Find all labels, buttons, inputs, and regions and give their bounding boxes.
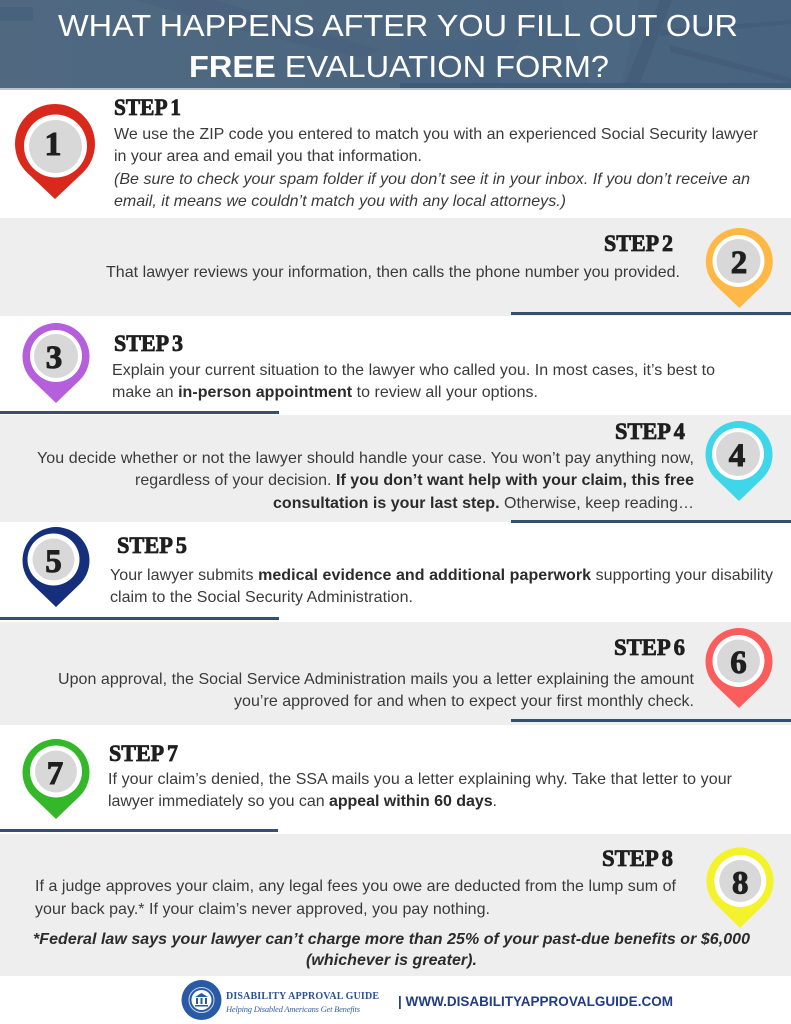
step 4 text: regardless of your decision. If you don’t want help with your claim, this free: [135, 472, 694, 489]
panel: step 4: [0, 415, 791, 523]
icon: pin 6: 6: [730, 645, 747, 681]
panel: step 2: [0, 218, 791, 316]
step 8 text: your back pay.* If your claim’s never approved, you pay nothing.: [35, 901, 490, 918]
step 7 text: STEP 7: [109, 741, 178, 766]
step 5 text: Your lawyer submits medical evidence and additional paperwork supporting your disability: [110, 567, 773, 584]
title: WHAT HAPPENS AFTER YOU FILL OUT OUR: [58, 8, 738, 43]
step 3 text: STEP 3: [114, 331, 183, 356]
icon: pin 8: 8: [732, 866, 749, 902]
footnote: [33, 931, 750, 969]
step 5 text: [110, 533, 773, 606]
icon: pin 6: [705, 628, 772, 708]
website url: | WWW.DISABILITYAPPROVALGUIDE.COM: [398, 994, 673, 1009]
step 2 text: [106, 231, 680, 281]
step 7 text: [108, 741, 733, 810]
step 6 text: you’re approved for and when to expect your first monthly check.: [234, 693, 694, 710]
icon: pin 7: [22, 739, 90, 819]
icon: pin 5: [22, 527, 90, 607]
step 6 text: STEP 6: [614, 635, 685, 660]
step 4 text: You decide whether or not the lawyer should handle your case. You won’t pay anything now,: [37, 450, 694, 467]
icon: pin 3: [22, 323, 90, 403]
icon: pin 2: 2: [731, 245, 747, 281]
panel: step 1: [15, 95, 759, 210]
step 8 text: If a judge approves your claim, any legal fees you owe are deducted from the lump sum of: [35, 878, 677, 895]
step 2 text: STEP 2: [604, 231, 673, 256]
icon: pin 3: 3: [46, 340, 62, 376]
icon: pin 2: [706, 228, 773, 308]
panel: step 8: [0, 834, 791, 976]
icon: pin 8: [706, 848, 774, 928]
icon: pin 4: 4: [729, 438, 745, 474]
step 7 text: If your claim’s denied, the SSA mails you a letter explaining why. Take that letter to your: [108, 771, 733, 788]
icon: logo seal: [182, 980, 222, 1020]
step 5 text: STEP 5: [117, 533, 187, 558]
logo text: Helping Disabled Americans Get Benefits: [225, 1004, 361, 1014]
step 4 text: STEP 4: [615, 419, 685, 444]
icon: pin 4: [705, 421, 772, 501]
step 7 text: lawyer immediately so you can appeal within 60 days.: [108, 793, 497, 810]
step 5 text: claim to the Social Security Administration.: [110, 589, 413, 606]
title: [58, 8, 738, 84]
step 1 text: email, it means we couldn’t match you with any local attorneys.): [114, 193, 566, 210]
footnote: (whichever is greater).: [306, 952, 477, 969]
step 2 text: That lawyer reviews your information, then calls the phone number you provided.: [106, 264, 680, 281]
panel: step 5: [0, 527, 773, 620]
panel: step 3: [0, 323, 715, 414]
step 6 text: Upon approval, the Social Service Administration mails you a letter explaining the amount: [58, 671, 695, 688]
icon: pin 1: 1: [44, 126, 62, 163]
step 3 text: make an in-person appointment to review all your options.: [112, 384, 538, 401]
step 1 text: We use the ZIP code you entered to match you with an experienced Social Security lawyer: [114, 126, 759, 143]
step 8 text: STEP 8: [602, 846, 673, 871]
step 3 text: Explain your current situation to the lawyer who called you. In most cases, it’s best to: [112, 362, 715, 379]
step 4 text: consultation is your last step. Otherwise, keep reading…: [273, 495, 694, 512]
title: FREE EVALUATION FORM?: [189, 49, 609, 84]
panel: step 6: [0, 622, 791, 725]
panel: step 7: [0, 739, 733, 832]
logo text: DISABILITY APPROVAL GUIDE: [226, 991, 379, 1002]
icon: pin 5: 5: [45, 544, 62, 580]
step 1 text: [114, 95, 759, 210]
step 1 text: in your area and email you that information.: [114, 148, 422, 165]
footer: [182, 980, 673, 1020]
step 1 text: STEP 1: [114, 95, 181, 120]
footnote: *Federal law says your lawyer can’t charge more than 25% of your past-due benefits or $6,000: [33, 931, 750, 948]
step 3 text: [112, 331, 715, 401]
step 8 text: [35, 846, 677, 918]
icon: pin 1: [15, 104, 95, 199]
logo text: [225, 991, 379, 1014]
step 6 text: [58, 635, 695, 710]
icon: pin 7: 7: [47, 756, 63, 792]
step 1 text: (Be sure to check your spam folder if you don’t see it in your inbox. If you don’t receive an: [114, 171, 750, 188]
step 4 text: [37, 419, 694, 512]
header banner: [0, 0, 791, 90]
